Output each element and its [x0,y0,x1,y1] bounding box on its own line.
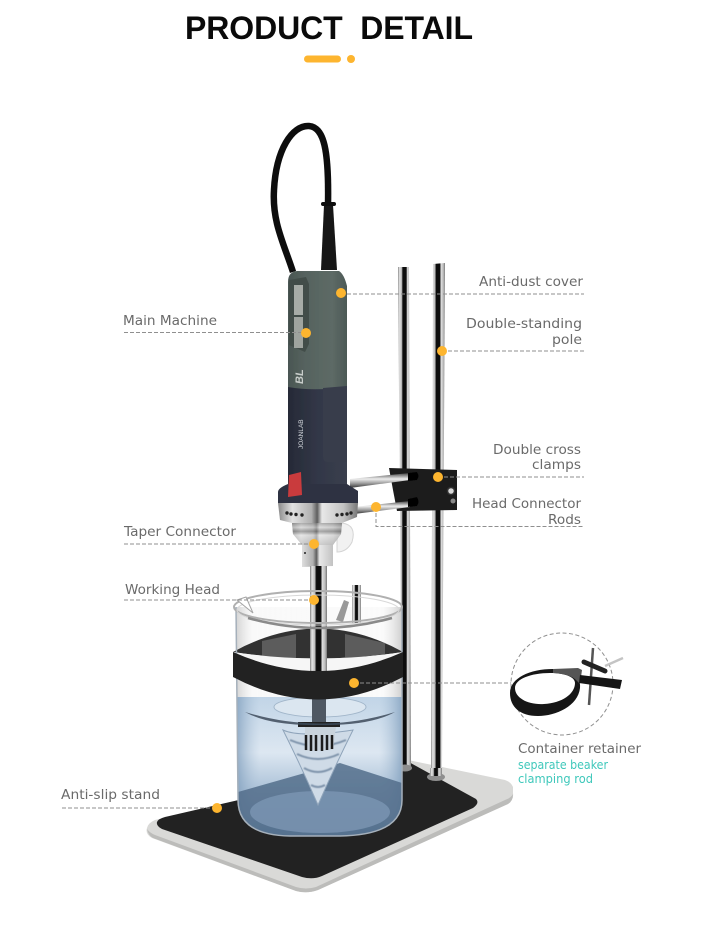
label: head connector rods: Rods [548,512,581,528]
label: anti-slip stand: Anti-slip stand [61,787,160,803]
inset: container retainer detail [510,633,623,735]
label: double cross clamps: clamps [532,457,581,473]
lower navy housing [288,386,347,490]
power cable [274,126,337,272]
label: container retainer [518,741,641,786]
clamp rods [584,648,623,705]
label: double-standing pole [466,316,582,348]
label: container retainer: separate beaker [518,757,609,772]
label: double-standing pole: pole [552,332,582,348]
label: head connector rods: Head Connector [472,496,581,512]
product illustration [147,126,513,892]
double cross clamp [389,468,457,511]
base plate [147,760,513,892]
marker dots [212,288,447,813]
label: taper connector: Taper Connector [123,524,236,540]
label: container retainer: clamping rod [518,771,593,786]
beaker rear band [233,628,403,671]
display panel [289,277,309,352]
label: anti-dust cover: Anti-dust cover [479,274,583,290]
anti-slip mat [157,761,477,878]
label: double-standing pole: Double-standing [466,316,582,332]
upper green housing [288,271,347,390]
label: double cross clamps: Double cross [493,442,581,458]
mat seen through water [238,763,402,836]
label: working head: Working Head [125,582,220,598]
leader lines [62,294,584,808]
brand mark: JOANLAB [298,419,305,449]
beaker inner clamp arm [336,600,349,622]
label: head connector rods [472,496,581,528]
label: container retainer: Container retainer [518,741,641,757]
model mark: BL [294,369,306,384]
water surface front edge [245,712,395,725]
label: main machine: Main Machine [123,313,217,329]
retainer strap [510,668,622,716]
transparent splash guard [337,523,353,552]
motor base [278,484,358,503]
title: PRODUCT DETAIL [185,10,473,46]
taper connector [292,523,342,567]
double-standing poles [398,263,445,781]
main machine body [278,271,358,552]
vortex and rotor [274,695,366,805]
working head shaft [310,566,327,676]
dashed circle [511,633,613,735]
water [237,697,402,836]
label: double cross clamps [493,442,581,473]
power switch [288,472,302,497]
title accent mark [304,55,355,63]
silver collar [278,503,358,523]
container retainer band [233,652,403,700]
head connector rods [350,472,418,514]
beaker back wall [236,607,402,836]
beaker glass [234,591,402,836]
